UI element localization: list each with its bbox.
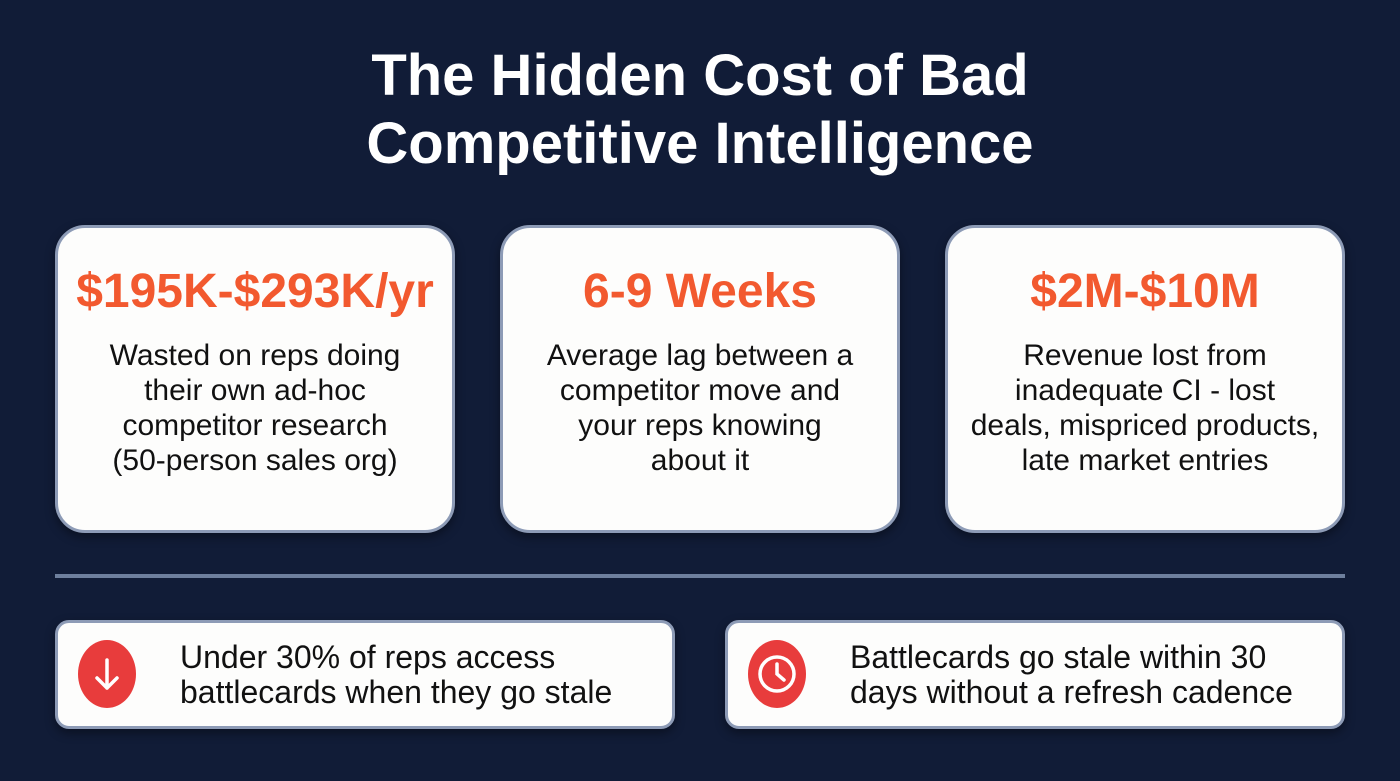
callout text: days without a refresh cadence bbox=[850, 674, 1293, 710]
description: inadequate CI - lost bbox=[1015, 374, 1275, 407]
callout text bbox=[180, 639, 612, 710]
callout: under 30% bbox=[55, 620, 675, 729]
callout text: Under 30% of reps access bbox=[180, 639, 555, 675]
description: your reps knowing bbox=[578, 409, 822, 442]
description bbox=[971, 339, 1319, 477]
callout: stale battlecards bbox=[725, 620, 1345, 729]
title bbox=[366, 43, 1034, 176]
description: about it bbox=[651, 444, 749, 477]
description: (50-person sales org) bbox=[112, 444, 398, 477]
title: Competitive Intelligence bbox=[366, 111, 1034, 176]
stat: 195K-293K: $195K-$293K/yr bbox=[76, 265, 434, 318]
callout text: battlecards when they go stale bbox=[180, 674, 612, 710]
icon: down arrow bbox=[78, 640, 136, 708]
card: lag bbox=[500, 225, 900, 533]
callout text: Battlecards go stale within 30 bbox=[850, 639, 1266, 675]
description bbox=[547, 339, 854, 477]
stat: 2M-10M: $2M-$10M bbox=[1030, 265, 1260, 318]
description: Revenue lost from bbox=[1023, 339, 1267, 372]
description bbox=[110, 339, 400, 477]
description: Average lag between a bbox=[547, 339, 853, 372]
callout text bbox=[850, 639, 1293, 710]
description: competitor research bbox=[122, 409, 388, 442]
icon: clock bbox=[748, 640, 806, 708]
description: Wasted on reps doing bbox=[110, 339, 400, 372]
stat: 6-9 weeks: 6-9 Weeks bbox=[583, 265, 817, 318]
card: revenue lost bbox=[945, 225, 1345, 533]
description: late market entries bbox=[1022, 444, 1268, 477]
title: The Hidden Cost of Bad bbox=[371, 43, 1029, 108]
description: their own ad-hoc bbox=[144, 374, 366, 407]
card: wasted spend bbox=[55, 225, 455, 533]
description: deals, mispriced products, bbox=[971, 409, 1319, 442]
description: competitor move and bbox=[560, 374, 840, 407]
